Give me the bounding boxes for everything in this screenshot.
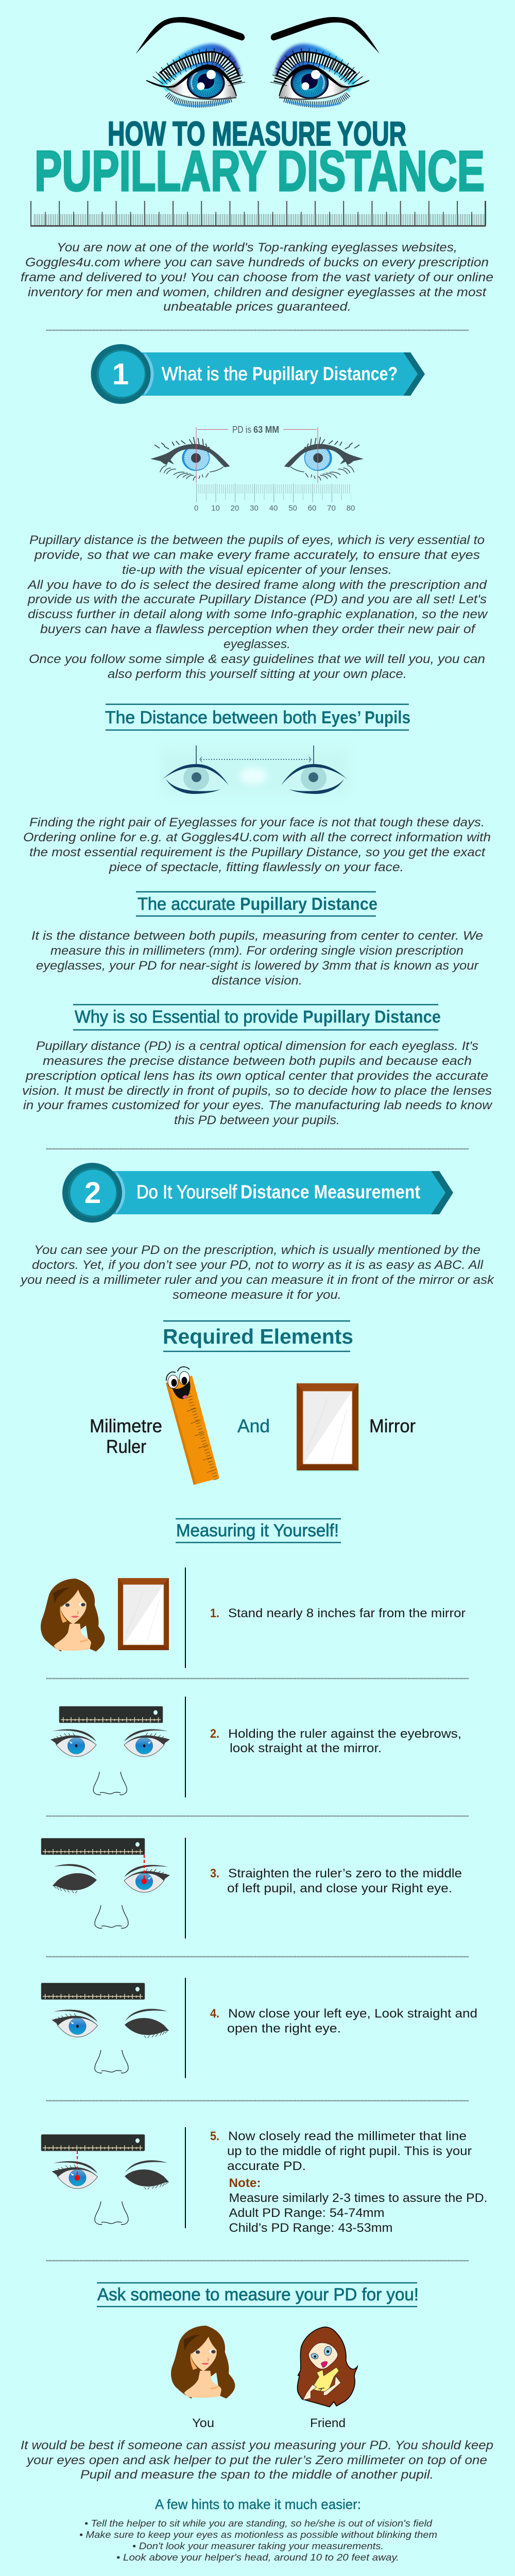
label: and: And [237, 1415, 270, 1436]
intro text: frame and delivered to you! You can choose from the vast variety of our online [21, 270, 493, 284]
text: why essential: Pupillary distance (PD) is a central optical dimension for each eyeglass. It's [36, 1039, 478, 1053]
list: hints: • Tell the helper to sit while you are standing, so he/she is out of vision's field [84, 2518, 433, 2529]
banner: section 2 [62, 1163, 453, 1223]
label: you: You [192, 2416, 214, 2430]
millimetre scale [196, 489, 351, 494]
step text [210, 2007, 477, 2036]
text: finding the right pair: the most essential requirement is the Pupillary Distance, so you get the exact [29, 845, 486, 859]
text: do it yourself: You can see your PD on the prescription, which is usually mentioned by the [34, 1243, 480, 1257]
note: Adult PD Range: 54-74mm [229, 2206, 384, 2220]
arrow: dotted distance arrow [196, 745, 314, 765]
number 2: 2 [84, 1176, 101, 1210]
heading: distance between eyes' pupils [105, 704, 410, 730]
step text: 5. [210, 2129, 219, 2143]
intro text [21, 241, 493, 314]
heading: why essential: Pupillary Distance [303, 1007, 441, 1027]
step text: Now closely read the millimeter that line [228, 2129, 467, 2143]
step text: Now close your left eye, Look straight and [228, 2007, 477, 2021]
illustration: ruler zero on left pupil, right eye closed [41, 1838, 170, 1928]
intro text: unbeatable prices guaranteed. [163, 300, 351, 314]
label: millimetre ruler [90, 1415, 162, 1457]
text: assistance: Pupil and measure the span to the middle of another pupil. [80, 2468, 434, 2482]
text: why essential: in your frames customized for your eyes. The manufacturing lab needs to know [23, 1098, 493, 1112]
ruler graphic [30, 201, 486, 226]
required elements row [90, 1367, 416, 1485]
eye highlights [197, 70, 320, 90]
icon: right eye [284, 437, 363, 481]
illustration: reading the millimetre at right pupil [41, 2134, 169, 2225]
text: assistance: It would be best if someone can assist you measuring your PD. You should keep [21, 2438, 493, 2452]
heading: accurate pupillary distance [136, 892, 377, 916]
text: do it yourself [20, 1243, 495, 1302]
heading: distance between eyes' pupils: Eyes’ Pupils [321, 708, 410, 727]
banner: section 1 [91, 344, 425, 404]
text: finding the right pair: Ordering online for e.g. at Goggles4U.com with all the correct information with [23, 831, 491, 844]
text: what is pupillary distance: Pupillary distance is the between the pupils of eyes, which is very essential to [29, 533, 485, 547]
banner heading: Distance Measurement [241, 1181, 420, 1202]
icon: left eye outline [162, 764, 229, 794]
list: hints: • Make sure to keep your eyes as motionless as possible without blinking them [79, 2530, 437, 2540]
text: finding the right pair [23, 816, 491, 874]
step text: look straight at the mirror. [230, 1741, 382, 1755]
text: why essential: prescription optical lens has its own optical center that provides the accurate [25, 1069, 488, 1083]
step 1 [41, 1567, 466, 1668]
step 2 [50, 1697, 461, 1798]
icon: smiling ruler [166, 1367, 219, 1485]
icon: pair of eyes with eyebrows [135, 17, 380, 106]
heading: measuring it yourself: Measuring it Yourself! [176, 1521, 339, 1540]
step text: 1. [210, 1606, 219, 1620]
text: what is pupillary distance: buyers can have a flawless perception when they order their new pair of [40, 622, 476, 636]
scale labels: 10 [211, 504, 220, 513]
text: why essential: this PD between your pupils. [174, 1113, 340, 1127]
heading: ask someone: Ask someone to measure your PD for you! [97, 2285, 419, 2304]
intro text: You are now at one of the world's Top-ranking eyeglasses websites, [57, 241, 457, 255]
icon: left eye [151, 437, 230, 481]
heading: hints: A few hints to make it much easier: [155, 2497, 361, 2512]
scale labels [194, 504, 355, 513]
step text: Stand nearly 8 inches far from the mirror [228, 1606, 466, 1620]
step text: 3. [210, 1867, 219, 1880]
scale labels: 60 [308, 504, 316, 513]
step text [210, 2129, 472, 2173]
list: hints [79, 2518, 437, 2563]
scale labels: 70 [327, 504, 336, 513]
PD measurement lines [196, 427, 318, 483]
text: finding the right pair: Finding the right pair of Eyeglasses for your face is not that tough these days. [29, 816, 485, 829]
banner heading: Do It Yourself [136, 1181, 237, 1202]
illustration: girl [41, 1579, 105, 1652]
text: accurate PD: eyeglasses, your PD for near-sight is lowered by 3mm that is known as your [36, 959, 479, 973]
list: hints: • Look above your helper's head, around 10 to 20 feet away. [116, 2552, 399, 2563]
text: accurate PD [31, 929, 483, 988]
text: finding the right pair: piece of spectacle, fitting flawlessly on your face. [109, 860, 404, 874]
icon: left eye [135, 17, 245, 106]
illustration: you and friend [171, 2326, 357, 2430]
text: what is pupillary distance: provide, so that we can make every frame accurately, to ensure that eyes [34, 548, 480, 562]
text: why essential: measures the precise distance between both pupils and because each [43, 1054, 472, 1068]
text: accurate PD: distance vision. [212, 974, 302, 988]
icon: right eye [271, 17, 380, 106]
label: millimetre ruler: Milimetre [90, 1415, 162, 1436]
list: hints: • Don't look your measurer taking your measurements. [132, 2541, 384, 2551]
text: assistance: your eyes open and ask helper to put the ruler’s Zero millimeter on top of one [26, 2453, 487, 2467]
label: friend: Friend [310, 2416, 346, 2430]
diagram: distance between pupils [160, 745, 351, 795]
step text: of left pupil, and close your Right eye. [227, 1882, 452, 1895]
PD label: PD is [232, 425, 251, 435]
text: why essential [22, 1039, 493, 1127]
note: Measure similarly 2-3 times to assure the PD. [229, 2191, 487, 2205]
step text: 2. [210, 1727, 219, 1741]
step text [210, 1867, 462, 1895]
note [229, 2176, 487, 2235]
text: assistance [21, 2438, 493, 2482]
step text: Holding the ruler against the eyebrows, [228, 1727, 461, 1741]
intro text: inventory for men and women, children and designer eyeglasses at the most [28, 285, 487, 299]
note: Child’s PD Range: 43-53mm [229, 2221, 392, 2235]
text: what is pupillary distance [27, 533, 488, 681]
text: what is pupillary distance: tie-up with the visual epicenter of your lenses. [122, 563, 392, 577]
heading: accurate pupillary distance: The accurate [138, 894, 235, 914]
label: millimetre ruler: Ruler [106, 1436, 146, 1457]
scale labels: 40 [269, 504, 278, 513]
heading: distance between eyes' pupils: The Distance between both [105, 708, 317, 727]
scale labels: 80 [347, 504, 355, 513]
step text: accurate PD. [227, 2159, 306, 2173]
scale labels: 50 [288, 504, 297, 513]
banner heading: Pupillary Distance? [252, 363, 398, 384]
intro text: Goggles4u.com where you can save hundreds of bucks on every prescription [25, 256, 489, 269]
text: accurate PD: measure this in millimeters (mm). For ordering single vision prescription [50, 944, 464, 958]
heading: required elements: Required Elements [163, 1325, 353, 1348]
icon: mirror [297, 1383, 359, 1471]
step 4 [41, 1978, 477, 2078]
text: what is pupillary distance: provide us with the accurate Pupillary Distance (PD) and you are all set! Let's [27, 592, 487, 606]
text: do it yourself: you need is a millimeter ruler and you can measure it in front of the mirror or ask [20, 1273, 495, 1287]
text: what is pupillary distance: eyeglasses. [224, 637, 290, 651]
note: Note: [229, 2176, 261, 2190]
text: do it yourself: doctors. Yet, if you don’t see your PD, not to worry as it is as easy as ABC. All [32, 1258, 484, 1272]
text: what is pupillary distance: also perform this yourself sitting at your own place. [108, 667, 407, 681]
heading: accurate pupillary distance: Pupillary Distance [240, 894, 377, 914]
text: what is pupillary distance: All you have to do is select the desired frame along with the prescription and [27, 578, 487, 592]
PD label [232, 425, 279, 435]
step text: up to the middle of right pupil. This is your [227, 2144, 472, 2158]
illustration: mirror [118, 1578, 169, 1650]
step text: Straighten the ruler’s zero to the middle [228, 1867, 462, 1880]
banner heading [136, 1181, 420, 1202]
text: what is pupillary distance: discuss further in detail along with some Info-graphic explanation, so the new [28, 607, 488, 621]
illustration: friend [297, 2327, 357, 2407]
PD label: 63 MM [253, 425, 279, 435]
illustration: ruler above open eyes [50, 1706, 170, 1795]
text: do it yourself: someone measure it for you. [173, 1288, 341, 1302]
step text: 4. [210, 2007, 219, 2021]
scale labels: 0 [194, 504, 198, 513]
text: accurate PD: It is the distance between both pupils, measuring from center to center. We [31, 929, 483, 943]
text: what is pupillary distance: Once you follow some simple & easy guidelines that we will tell you, you can [29, 652, 485, 666]
label: mirror: Mirror [369, 1415, 416, 1436]
icon: right eye outline [281, 764, 348, 794]
text: why essential: vision. It must be directly in front of pupils, so to decide how to place the lenses [22, 1084, 492, 1098]
banner heading: What is the [162, 363, 248, 384]
diagram: PD between eyes on millimetre scale [151, 425, 363, 513]
heading: why essential [73, 1005, 441, 1030]
illustration: you [171, 2326, 235, 2399]
step 5 [41, 2127, 487, 2235]
heading: why essential: Why is so Essential to provide [75, 1007, 298, 1027]
illustration: left eye closed, right eye open [41, 1983, 169, 2073]
scale labels: 20 [231, 504, 239, 513]
scale labels: 30 [250, 504, 259, 513]
step text [210, 1727, 461, 1755]
step 3 [41, 1838, 462, 1938]
title [35, 114, 485, 203]
banner heading [162, 363, 398, 384]
number 1: 1 [112, 358, 129, 391]
step text: open the right eye. [227, 2022, 341, 2036]
